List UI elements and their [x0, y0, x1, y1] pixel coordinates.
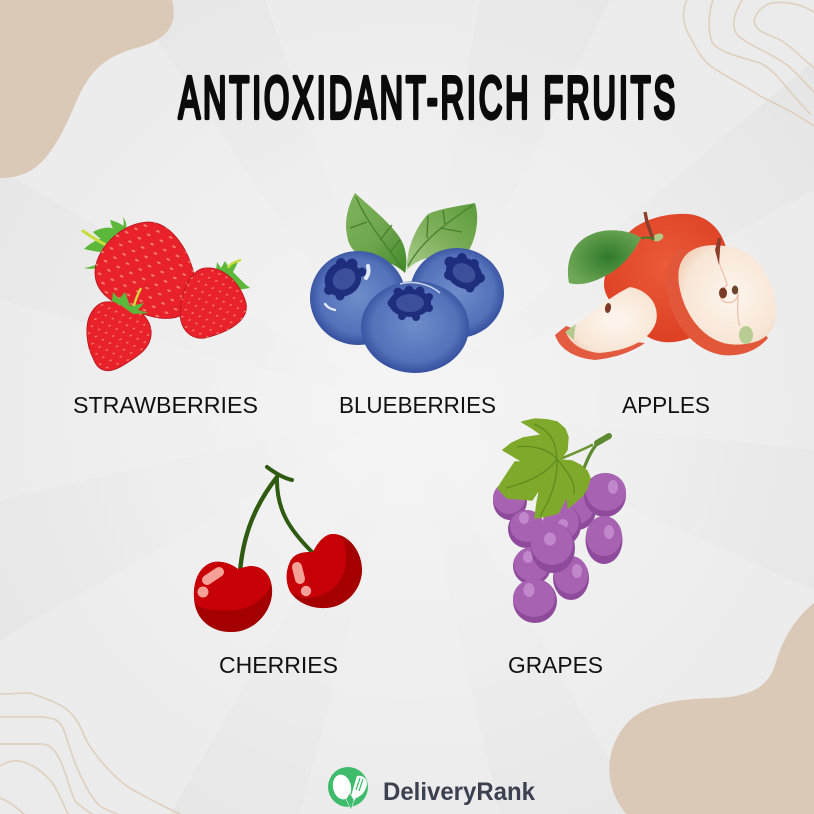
- title: ANTIOXIDANT-RICH FRUITS: [178, 66, 675, 132]
- icon: left blueberry: [310, 251, 406, 345]
- corner blob: bottom right: [609, 603, 814, 814]
- icon: cherry stems: [240, 467, 312, 572]
- icon: apple leaf: [568, 230, 654, 284]
- label: strawberries: STRAWBERRIES: [73, 392, 258, 418]
- corner blob: top left: [0, 0, 174, 178]
- logo wordmark: DeliveryRank: [383, 778, 535, 806]
- icon: strawberry leaves back: [83, 217, 128, 269]
- panel: grapes: [493, 419, 626, 678]
- icon: grape leaf: [498, 419, 590, 518]
- icon: right leaf: [407, 203, 477, 270]
- icon: right strawberry: [180, 260, 250, 338]
- icon: whole apple: [604, 214, 728, 342]
- icon: apple wedge: [555, 287, 657, 360]
- logo: DeliveryRank: [328, 767, 535, 810]
- icon: large strawberry: [95, 222, 195, 319]
- icon: left cherry: [194, 562, 272, 632]
- panel: apples: [555, 212, 776, 418]
- icon: left leaf: [346, 193, 406, 273]
- label: apples: APPLES: [622, 392, 710, 418]
- icon: right blueberry: [410, 248, 504, 338]
- icon: apple stem: [645, 212, 653, 239]
- label: blueberries: BLUEBERRIES: [339, 392, 496, 418]
- label: cherries: CHERRIES: [219, 652, 338, 678]
- icon: front blueberry: [361, 281, 469, 373]
- icon: grape bunch: [493, 473, 626, 623]
- icon: spoon and fork badge: [328, 767, 368, 810]
- icon: left strawberry: [87, 288, 151, 371]
- icon: right cherry: [287, 534, 362, 608]
- contour lines: top right: [684, 0, 814, 126]
- panel: blueberries: [310, 193, 504, 418]
- icon: grape stem: [560, 436, 609, 468]
- label: grapes: GRAPES: [508, 652, 603, 678]
- panel: cherries: [194, 467, 362, 678]
- icon: apple half: [666, 238, 776, 355]
- contour lines: bottom left: [0, 693, 180, 814]
- panel: strawberries: [73, 217, 258, 418]
